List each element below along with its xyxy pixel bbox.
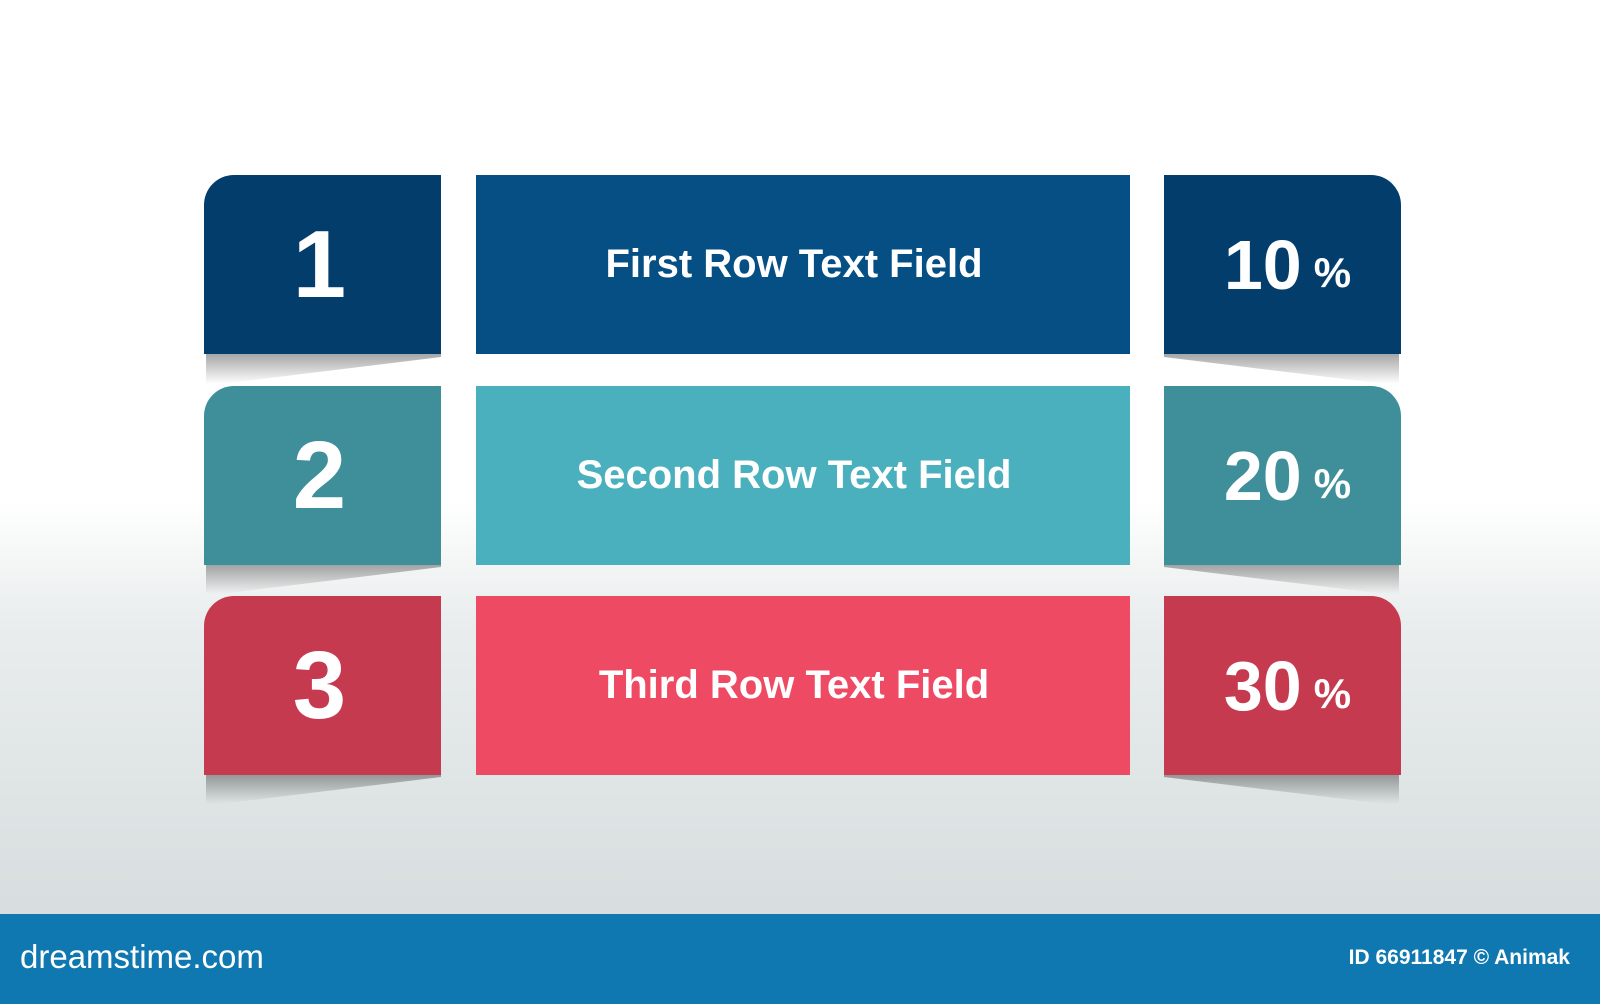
row 3 percent: %	[1314, 670, 1351, 716]
footer logo text: dreamstime.com	[20, 938, 264, 975]
row 2 text field	[476, 386, 1130, 565]
row 3 number: 3	[293, 632, 346, 738]
row 2 text field: Second Row Text Field	[577, 453, 1011, 497]
footer bar	[0, 914, 1600, 1004]
row 2 percent	[1164, 386, 1401, 565]
row 2 number: 2	[293, 422, 346, 528]
row 3 percent: 30	[1224, 646, 1302, 724]
row 1 percent: %	[1314, 248, 1351, 296]
shadows	[206, 354, 1399, 801]
row 3 text field: Third Row Text Field	[599, 663, 989, 707]
row 1 number: 1	[293, 210, 346, 318]
row 1 percent: 10	[1224, 226, 1302, 304]
row 2 number	[204, 386, 441, 565]
row 2 percent: %	[1314, 460, 1351, 506]
row 1 text field: First Row Text Field	[605, 242, 983, 286]
row 3 number	[204, 596, 441, 775]
row 2 percent: 20	[1224, 436, 1302, 514]
footer id text: ID 66911847 © Animak	[1349, 946, 1570, 969]
row 1 number	[204, 175, 441, 354]
row 1 text field	[476, 175, 1130, 354]
row 1 percent	[1164, 175, 1401, 354]
row 3 text field	[476, 596, 1130, 775]
row 3 percent	[1164, 596, 1401, 775]
